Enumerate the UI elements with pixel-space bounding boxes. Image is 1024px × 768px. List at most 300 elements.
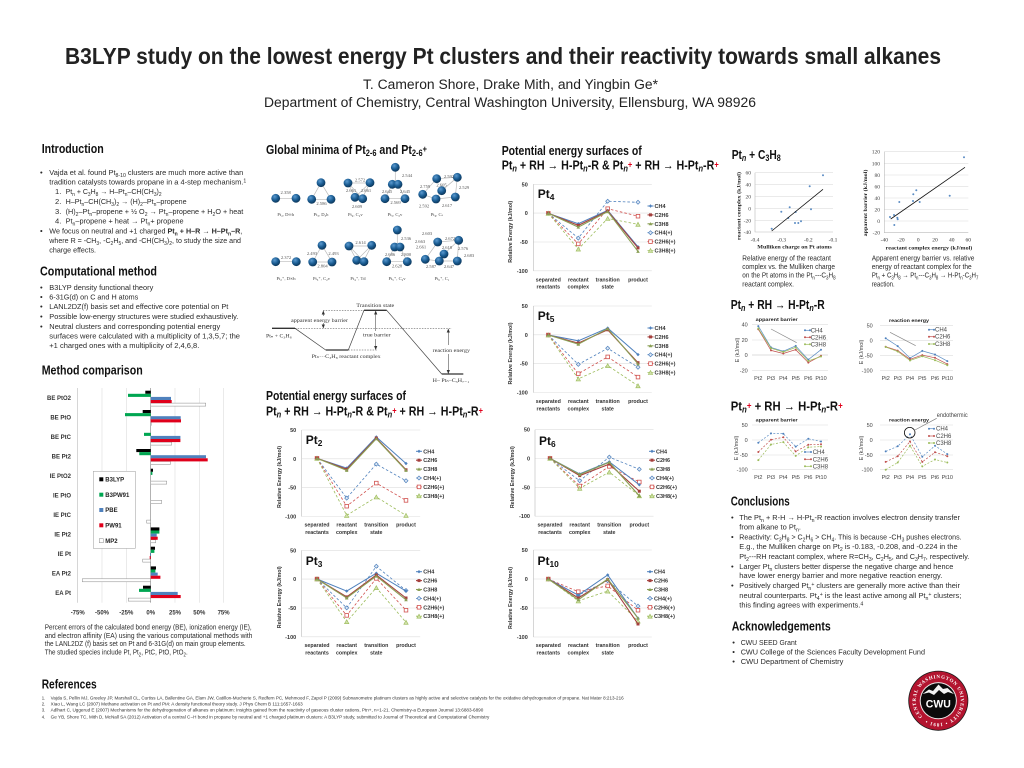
bar chart: percent errors: -75% — [71, 610, 85, 616]
scatter plot: barrier vs reactant complex energy: -20 — [873, 231, 880, 237]
line chart: Pt4 potential energy surface: separated — [536, 277, 561, 283]
molecule structures: cationic clusters: 2.661 — [416, 244, 427, 250]
line chart: neutral reaction energy: -50 — [865, 354, 873, 360]
legend: cation reaction energy: C3H8 — [936, 441, 952, 447]
line chart: cation reaction energy: Pt4 — [906, 475, 914, 481]
introduction text block: Vajda et al. found Pt8-10 clusters are much more active than — [49, 168, 243, 178]
line chart: Pt5 potential energy surface: state — [602, 406, 614, 412]
molecule structures: cationic clusters: 2.372 — [281, 255, 292, 260]
conclusions text block: this finding agrees with experiments.4 — [739, 600, 863, 610]
molecule structures: cationic clusters: 2.493 — [328, 251, 339, 256]
line chart: Pt2 potential energy surface: 50 — [290, 428, 296, 434]
reference list: Xiao L, Wang LC (2007) Methane activation on Pt and Pt4: A density functional theory study. J Phys Chem B 111:1657-1663 — [51, 702, 303, 706]
line chart: cation apparent barrier: Pt4 — [779, 475, 787, 481]
scatter plot: barrier vs reactant complex energy: 0 — [917, 237, 920, 243]
computational method text block: 6-31G(d) on C and H atoms — [49, 292, 138, 302]
legend: Pt4 chart: C3H8(+) — [654, 248, 676, 254]
line chart: Pt6 potential energy surface: 0 — [527, 457, 530, 463]
scatter plot: reactant complex vs Mulliken charge: -0.3 — [777, 237, 786, 243]
panel: neutral trends — [731, 298, 953, 382]
line chart: cation apparent barrier: 50 — [742, 423, 748, 429]
line chart: Pt3 potential energy surface: separated — [304, 643, 330, 649]
line chart: Pt2 potential energy surface — [277, 428, 444, 536]
scatter plot: barrier vs reactant complex energy: 40 — [874, 196, 880, 202]
line chart: Pt3 potential energy surface: product — [396, 643, 416, 649]
line chart: cation reaction energy: Pt2 — [882, 475, 890, 481]
legend: Pt3 chart: C3H8 — [423, 588, 437, 594]
molecule structures: neutral clusters: 2.592 — [444, 174, 455, 179]
line chart: Pt2 potential energy surface: 0 — [293, 457, 296, 463]
molecule structures: cationic clusters: 2.672 — [445, 236, 456, 241]
line chart: cation apparent barrier: -50 — [740, 453, 748, 459]
energy profile diagram — [266, 303, 470, 384]
legend: Pt5 chart: C3H8(+) — [654, 370, 676, 376]
line chart: Pt3 potential energy surface: reactants — [305, 650, 329, 656]
line chart: Pt2 potential energy surface: Relative Energy (kJ/mol) — [277, 446, 283, 508]
line chart: Pt2 potential energy surface: product — [396, 523, 416, 529]
heading: global minima: Global minima of Pt2-6 and Pt2-6+ — [266, 143, 427, 158]
heading: Ptn + C3H8: Ptn + C3H8 — [732, 148, 781, 162]
energy profile diagram: Ptₙ + C₃H₈ — [266, 334, 292, 340]
legend: cation reaction energy — [929, 427, 952, 447]
line chart: Pt5 potential energy surface: Relative Energy (kJ/mol) — [508, 322, 514, 384]
line chart: Pt4 potential energy surface: reactant — [568, 277, 589, 283]
line chart: neutral reaction energy: Pt5 — [918, 376, 926, 382]
scatter plot: barrier vs reactant complex energy: reactant complex energy (kJ/mol) — [886, 244, 973, 252]
heading: computational method: Computational method — [40, 265, 157, 279]
acknowledgements list — [732, 638, 925, 666]
conclusions text block: Larger Ptn clusters better disperse the negative charge and hence — [739, 562, 953, 572]
introduction text block: charge effects. — [49, 246, 96, 254]
caption: method comparison — [45, 623, 252, 658]
molecule structures: neutral clusters: 2.358 — [281, 190, 292, 195]
heading: method comparison: Method comparison — [42, 363, 143, 377]
line chart: neutral reaction energy: 50 — [867, 324, 873, 330]
panel label: Pt5: Pt5 — [538, 309, 555, 324]
line chart: Pt10 potential energy surface: -100 — [517, 635, 528, 641]
line chart: Pt6 potential energy surface: complex — [569, 530, 590, 536]
line chart: Pt6 potential energy surface: reactants — [538, 530, 562, 536]
bar chart: percent errors: IE PtO — [53, 493, 71, 499]
panel: references — [42, 677, 624, 720]
line chart: neutral apparent barrier: Pt3 — [767, 376, 775, 382]
line chart: Pt6 potential energy surface: 50 — [524, 428, 530, 434]
line chart: Pt5 potential energy surface: -50 — [520, 362, 528, 368]
molecule structures: cationic clusters: 2.647 — [444, 264, 455, 269]
line chart: neutral apparent barrier: E (kJ/mol) — [735, 337, 741, 362]
line chart: Pt2 potential energy surface: reactants — [305, 530, 329, 536]
line chart: Pt4 potential energy surface: product — [628, 277, 648, 283]
reference list: Adlhart C, Uggerud E (2007) Mechanisms for the dehydrogenation of alkanes on platinum: Insights gained from the reactivity of gaseous cluster cations, Ptn+, n=1-21. Chemistry-a European Journal 13:6883-6890 — [51, 708, 484, 712]
molecule structures: neutral clusters: 2.617 — [442, 203, 453, 208]
scatter plot: reactant complex vs Mulliken charge: 20 — [746, 194, 751, 200]
conclusions text block: • — [731, 513, 734, 522]
molecule structures: neutral clusters: Pt₂, D∞h — [277, 212, 295, 218]
heading: potential energy surfaces, right: Potential energy surfaces of — [502, 144, 642, 158]
heading: introduction: Introduction — [42, 142, 104, 156]
panel label: Pt6: Pt6 — [539, 434, 556, 448]
line chart: Pt6 potential energy surface: reactant — [569, 523, 590, 529]
caption: method comparison: Percent errors of the calculated bond energy (BE), ionization energy (IE), — [45, 623, 252, 632]
legend: neutral reaction energy: C2H6 — [935, 335, 951, 341]
conclusions text block: • — [731, 562, 734, 571]
caption: Mulliken correlation — [742, 253, 836, 288]
legend: Pt6 chart: C3H8(+) — [656, 494, 677, 500]
line chart: cation apparent barrier: Pt6 — [804, 475, 812, 481]
bar chart: percent errors: BE PtO — [50, 415, 71, 421]
line chart: Pt5 potential energy surface: complex — [568, 406, 589, 412]
line chart: Pt3 potential energy surface: complex — [336, 650, 357, 656]
acknowledgements list: • — [732, 648, 735, 656]
molecule structures: neutral clusters: 2.605 — [436, 182, 447, 188]
acknowledgements list: CWU College of the Sciences Faculty Development Fund — [741, 648, 925, 656]
line chart: neutral reaction energy: Pt3 — [894, 376, 902, 382]
caption: barrier correlation: energy of reactant complex for the — [872, 262, 972, 271]
molecule structures: cationic clusters: 2.614 — [355, 240, 366, 245]
panel: Ptn + C3H8 correlations — [732, 148, 978, 288]
bar chart: percent errors — [47, 388, 230, 616]
legend: methods — [93, 471, 135, 548]
molecule structures: cationic clusters: 2.804 — [317, 264, 328, 268]
computational method text block: surfaces were calculated with a multiplicity of 1,3,5,7; the — [49, 332, 240, 340]
scatter plot: barrier vs reactant complex energy: 0 — [877, 219, 880, 225]
legend: Pt10 chart: C2H6(+) — [654, 605, 675, 611]
line chart: Pt6 potential energy surface: product — [629, 523, 649, 529]
legend: neutral barrier: CH4 — [811, 328, 823, 334]
heading: references: References — [42, 677, 97, 691]
computational method text block: • — [40, 312, 43, 321]
line chart: Pt2 potential energy surface: state — [370, 530, 383, 536]
computational method text block: • — [40, 302, 43, 311]
caption: Mulliken correlation: on the Pt atoms in the Ptn---C3H8 — [742, 271, 836, 281]
line chart: Pt10 potential energy surface: Relative Energy (kJ/mol) — [508, 567, 514, 629]
legend: Pt2 chart: CH4(+) — [423, 476, 441, 482]
caption: Mulliken correlation: reactant complex. — [742, 279, 794, 288]
molecule structures: neutral clusters: Pt₆, Cₛ — [431, 212, 444, 218]
computational method text block: +1 charged ones with a multiplicity of 2,4,6,8. — [49, 341, 199, 350]
introduction text block: 1. — [55, 187, 61, 196]
line chart: Pt6 potential energy surface: -100 — [519, 514, 530, 520]
molecule structures: cationic clusters: Pt₃⁺, C₂v — [313, 276, 331, 282]
reference list: 4. — [42, 714, 45, 720]
introduction text block: 2. — [55, 197, 61, 206]
legend: methods: B3LYP — [105, 478, 124, 484]
caption: method comparison: and electron affinity (EA) using the various computational methods with — [45, 631, 252, 640]
introduction text block: 3. — [55, 207, 61, 216]
bar chart: percent errors: EA Pt — [55, 591, 71, 597]
line chart: cation reaction energy: E (kJ/mol) — [859, 435, 865, 460]
line chart: neutral apparent barrier: Pt4 — [779, 376, 787, 382]
legend: Pt10 chart: C3H8 — [654, 588, 668, 594]
line chart: neutral apparent barrier: Pt2 — [754, 376, 762, 382]
line chart: Pt5 potential energy surface: reactant — [568, 399, 589, 405]
computational method text block: Neutral clusters and corresponding potential energy — [49, 322, 220, 331]
line chart: neutral apparent barrier — [735, 317, 828, 382]
energy profile diagram: apparent energy barrier — [291, 318, 348, 324]
scatter plot: barrier vs reactant complex energy: 60 — [874, 185, 880, 191]
line chart: Pt10 potential energy surface: 0 — [525, 577, 528, 583]
conclusions text block — [731, 513, 969, 610]
line chart: Pt4 potential energy surface: transition — [596, 277, 620, 283]
bar chart: percent errors: BE PtC — [51, 435, 72, 441]
heading: potential energy surfaces, right: Ptn + RH → H-Ptn-R & Ptn+ + RH → H-Ptn-R+ — [502, 158, 719, 173]
molecule structures: neutral clusters: 2.661 — [361, 188, 372, 193]
legend: methods: PBE — [105, 508, 118, 514]
bar chart: percent errors: -25% — [119, 610, 134, 616]
scatter plot: barrier vs reactant complex energy: apparent barrier (kJ/mol) — [862, 169, 869, 236]
legend: Pt4 chart — [648, 204, 676, 254]
line chart: Pt6 potential energy surface: transition — [597, 523, 621, 529]
heading: cation reaction: Ptn+ + RH → H-Ptn-R+ — [731, 400, 843, 414]
conclusions text block: • — [731, 581, 734, 590]
panel label: Pt10: Pt10 — [538, 554, 559, 568]
line chart: Pt3 potential energy surface — [277, 548, 444, 656]
line chart: Pt5 potential energy surface: separated — [536, 399, 561, 405]
line chart: Pt5 potential energy surface: 0 — [525, 333, 528, 339]
legend: Pt5 chart: CH4(+) — [654, 353, 673, 359]
legend: Pt6 chart — [649, 449, 677, 500]
legend: Pt6 chart: C3H8 — [656, 467, 670, 473]
legend: neutral barrier: C3H8 — [811, 342, 827, 348]
line chart: Pt4 potential energy surface: 0 — [525, 211, 528, 217]
bar chart: percent errors: EA Pt2 — [52, 572, 72, 578]
icon: CWU seal logo: CWU — [926, 698, 951, 710]
scatter plot: reactant complex vs Mulliken charge: Mulliken charge on Pt atoms — [757, 244, 832, 250]
legend: neutral barrier: C2H6 — [811, 335, 827, 341]
legend: Pt2 chart: C3H8 — [423, 467, 437, 473]
line chart: Pt5 potential energy surface — [508, 304, 676, 412]
line chart: neutral reaction energy: Pt4 — [906, 376, 914, 382]
legend: neutral reaction energy: C3H8 — [935, 342, 951, 348]
legend: Pt4 chart: C2H6 — [654, 213, 669, 219]
line chart: Pt10 potential energy surface: state — [602, 650, 614, 656]
acknowledgements list: CWU SEED Grant — [741, 638, 797, 647]
line chart: cation apparent barrier: Pt3 — [767, 475, 775, 481]
computational method text block: LANL2DZ(f) basis set and effective core potential on Pt — [49, 302, 229, 311]
molecule structures: cationic clusters: Pt₅⁺, C₂v — [388, 276, 406, 282]
scatter plot: reactant complex vs Mulliken charge: -0.1 — [829, 237, 838, 243]
legend: Pt2 chart: CH4 — [423, 449, 435, 455]
scatter plot: reactant complex vs Mulliken charge: -40 — [744, 230, 751, 236]
title: B3LYP study on the lowest energy Pt clusters and their reactivity towards small alkanes — [65, 43, 941, 69]
line chart: cation apparent barrier: Pt5 — [792, 475, 800, 481]
legend: neutral reaction energy: CH4 — [935, 328, 948, 334]
line chart: Pt6 potential energy surface: state — [603, 530, 616, 536]
scatter plot: reactant complex vs Mulliken charge — [736, 171, 838, 250]
reference list: 2. — [42, 702, 45, 706]
line chart: cation reaction energy: reaction energy — [889, 418, 929, 424]
line chart: cation apparent barrier: -100 — [737, 468, 748, 474]
energy profile diagram: reaction energy — [433, 348, 470, 354]
molecule structures: cationic clusters — [271, 226, 475, 282]
scatter plot: reactant complex vs Mulliken charge: 40 — [746, 182, 751, 188]
line chart: neutral reaction energy: Pt10 — [942, 376, 953, 382]
molecule structures: cationic clusters: 2.576 — [458, 246, 469, 251]
line chart: Pt6 potential energy surface: Relative Energy (kJ/mol) — [510, 446, 516, 508]
line chart: neutral reaction energy: Pt2 — [882, 376, 890, 382]
line chart: Pt5 potential energy surface: product — [628, 399, 648, 405]
line chart: cation apparent barrier: Pt2 — [754, 475, 762, 481]
line chart: neutral reaction energy: E (kJ/mol) — [859, 339, 865, 364]
line chart: Pt5 potential energy surface: transition — [596, 399, 620, 405]
bar chart: percent errors: 75% — [218, 610, 230, 616]
line chart: Pt5 potential energy surface: -100 — [517, 390, 528, 396]
molecule structures: cationic clusters: 2.683 — [464, 253, 475, 258]
line chart: Pt10 potential energy surface: reactant — [568, 643, 589, 649]
energy profile diagram: H– Ptₙ–C₃H₇₋₁ — [433, 378, 469, 384]
reference list: 1. — [42, 696, 45, 700]
line chart: cation reaction energy: 50 — [867, 423, 873, 429]
legend: Pt6 chart: C2H6 — [656, 458, 670, 464]
line chart: Pt10 potential energy surface: complex — [568, 650, 589, 656]
scatter plot: barrier vs reactant complex energy: 80 — [874, 173, 880, 179]
scatter plot: reactant complex vs Mulliken charge: 60 — [746, 171, 751, 177]
conclusions text block: Pt2---RH reactant complex, where R=CH3, C2H5, and C3H7, respectively. — [739, 552, 969, 562]
molecule structures: neutral clusters: Pt₄, C₂v — [348, 212, 363, 218]
molecule structures: neutral clusters: 2.572 — [355, 178, 366, 182]
caption: method comparison: The studied species include Pt, Pt2, PtC, PtO, PtO2. — [45, 648, 188, 658]
line chart: neutral reaction energy: reaction energy — [889, 318, 929, 324]
panel: introduction — [40, 142, 246, 254]
computational method text block: B3LYP density functional theory — [49, 283, 153, 292]
scatter plot: barrier vs reactant complex energy: 40 — [949, 237, 955, 243]
caption: barrier correlation: Apparent energy barrier vs. relative — [872, 253, 974, 262]
reference list: 3. — [42, 708, 45, 712]
introduction text block: where R = -CH3, -C2H5, and -CH(CH3)2, to study the size and — [48, 236, 241, 246]
line chart: Pt4 potential energy surface: reactants — [537, 285, 560, 291]
line chart: Pt10 potential energy surface: transition — [596, 643, 620, 649]
molecule structures: neutral clusters: 2.544 — [402, 173, 413, 178]
line chart: Pt3 potential energy surface: 50 — [290, 548, 296, 554]
scatter plot: reactant complex vs Mulliken charge: reactant complex (kJ/mol) — [736, 172, 742, 240]
energy profile diagram: true barrier — [363, 332, 391, 338]
line chart: cation apparent barrier: E (kJ/mol) — [734, 435, 740, 460]
molecule structures: neutral clusters: 2.645 — [382, 189, 393, 194]
reference list — [42, 696, 624, 720]
molecule structures: cationic clusters: 2.800 — [401, 252, 412, 257]
bar chart: percent errors: -50% — [95, 610, 110, 616]
line chart: Pt10 potential energy surface: product — [628, 643, 648, 649]
introduction text block: We focus on neutral and +1 charged Ptn + H–R → H–Ptn–R, — [49, 226, 242, 237]
acknowledgements list: CWU Department of Chemistry — [741, 657, 844, 666]
panel: acknowledgements — [732, 620, 925, 666]
caption: Mulliken correlation: Relative energy of the reactant — [742, 253, 832, 262]
introduction text block: H–Ptn–CH(CH3)2 → (H)2–Ptn–propene — [66, 197, 187, 207]
molecule structures: cationic clusters: 2.603 — [422, 231, 433, 236]
legend: Pt4 chart: CH4(+) — [654, 231, 673, 237]
legend: Pt4 chart: CH4 — [654, 204, 666, 210]
conclusions text block: neutral counterparts. Pt4+ is the least active among all Ptn+ clusters; — [739, 591, 961, 601]
panel: cation trends — [731, 400, 968, 481]
computational method text block: • — [40, 283, 43, 292]
line chart: Pt2 potential energy surface: reactant — [336, 523, 357, 529]
bar chart: percent errors: BE PtO2 — [47, 396, 72, 402]
line chart: neutral reaction energy: 0 — [870, 339, 873, 345]
molecule structures: neutral clusters: 2.645 — [400, 189, 411, 194]
line chart: cation apparent barrier: Pt10 — [815, 475, 827, 481]
computational method text block: • — [40, 292, 43, 302]
line chart: Pt3 potential energy surface: 0 — [293, 577, 296, 583]
introduction text block: (H)2–Ptn–propene + ½ O2 → Ptn–propene + H2O + heat — [66, 207, 244, 217]
reference list: Vajda S, Pellin MJ, Greeley JP, Marshall CL, Curtiss LA, Ballentine GA, Elam JW, Catillon-Mucherie S, Redfern PC, Mehmood F, Zapol P (2009) Subnanometre platinum clusters as highly active and selective catalysts for the oxidative dehydrogenation of propane. Nat Mater 8:213-216 — [51, 696, 624, 700]
legend: Pt2 chart: C2H6 — [423, 458, 437, 464]
computational method text block: • — [40, 322, 43, 331]
molecule structures: neutral clusters: 2.586 — [316, 201, 327, 206]
molecule structures: cationic clusters: 2.686 — [385, 252, 396, 257]
line chart: cation reaction energy: -50 — [865, 453, 873, 459]
introduction text block: • — [40, 226, 43, 236]
line chart: cation reaction energy: Pt5 — [918, 475, 926, 481]
legend: Pt3 chart: CH4 — [423, 570, 435, 576]
legend: Pt6 chart: CH4 — [656, 449, 668, 455]
molecule structures: cationic clusters: Pt₂⁺, D∞h — [276, 276, 296, 282]
legend: Pt3 chart — [416, 570, 444, 620]
callout: endothermic: endothermic — [937, 413, 968, 419]
scatter plot: barrier vs reactant complex energy: 20 — [932, 237, 938, 243]
heading: potential energy surfaces, left — [266, 389, 483, 419]
legend: Pt10 chart: C3H8(+) — [654, 614, 675, 620]
legend: Pt5 chart: C3H8 — [654, 344, 669, 350]
molecule structures: neutral clusters: 2.569 — [390, 200, 401, 205]
legend: Pt5 chart — [648, 326, 676, 376]
legend: cation reaction energy: CH4 — [936, 427, 949, 433]
introduction text block: 4. — [55, 216, 61, 226]
line chart: neutral apparent barrier: 0 — [745, 353, 748, 359]
legend: Pt6 chart: CH4(+) — [656, 476, 674, 482]
caption: barrier correlation: Ptn + C3H8 → Ptn---C3H8 → H-Ptn-C3H7 — [872, 271, 978, 281]
line chart: neutral reaction energy — [859, 318, 953, 382]
molecule structures: cationic clusters: 2.493 — [307, 251, 318, 256]
line chart: cation reaction energy: -100 — [862, 468, 873, 474]
line chart: Pt3 potential energy surface: reactant — [336, 643, 357, 649]
line chart: neutral apparent barrier: 40 — [742, 323, 748, 329]
molecule structures: neutral clusters: 2.661 — [346, 188, 357, 193]
legend: Pt3 chart: CH4(+) — [423, 596, 441, 602]
legend: Pt5 chart: CH4 — [654, 326, 666, 332]
scatter plot: barrier vs reactant complex energy: 20 — [874, 208, 880, 214]
scatter plot: barrier vs reactant complex energy: 120 — [872, 150, 880, 156]
panel label: Pt4: Pt4 — [538, 187, 555, 202]
bar chart: percent errors: IE PtC — [53, 513, 72, 519]
line chart: Pt6 potential energy surface — [510, 428, 677, 536]
conclusions text block: The Ptn + R-H → H-Ptn-R reaction involves electron density transfer — [739, 513, 960, 523]
heading: acknowledgements: Acknowledgements — [732, 620, 831, 634]
line chart: cation apparent barrier: apparent barrier — [756, 418, 798, 424]
line chart: Pt4 potential energy surface: -100 — [517, 269, 528, 275]
line chart: Pt6 potential energy surface: separated — [537, 523, 563, 529]
line chart: Pt3 potential energy surface: Relative Energy (kJ/mol) — [277, 566, 283, 628]
conclusions text block: E.g., the Mulliken charge on Pt2 is -0.183, -0.208, and -0.224 in the — [739, 542, 958, 553]
panel: conclusions — [731, 495, 969, 610]
panel: computational method — [40, 265, 240, 350]
line chart: Pt4 potential energy surface: state — [602, 285, 614, 291]
legend: methods: B3PW91 — [105, 493, 130, 499]
scatter plot: reactant complex vs Mulliken charge: -0.4 — [751, 237, 760, 243]
introduction text block: tradition catalysts towards propane in a 4-step mechanism.1 — [49, 178, 246, 186]
legend: Pt3 chart: C3H8(+) — [423, 614, 444, 620]
caption: Mulliken correlation: complex vs. the Mulliken charge — [742, 262, 835, 271]
legend: Pt5 chart: C2H6 — [654, 335, 669, 341]
line chart: cation apparent barrier: 0 — [745, 438, 748, 444]
bar chart: percent errors: IE PtO2 — [50, 474, 72, 480]
legend: neutral reaction energy — [929, 328, 951, 348]
line chart: Pt2 potential energy surface: -50 — [288, 486, 296, 492]
line chart: Pt3 potential energy surface: -100 — [285, 635, 296, 641]
line chart: Pt2 potential energy surface: complex — [336, 530, 357, 536]
scatter plot: reactant complex vs Mulliken charge: 0 — [748, 206, 751, 212]
line chart: Pt5 potential energy surface: 50 — [522, 304, 528, 310]
panel label: Pt2: Pt2 — [306, 433, 323, 448]
